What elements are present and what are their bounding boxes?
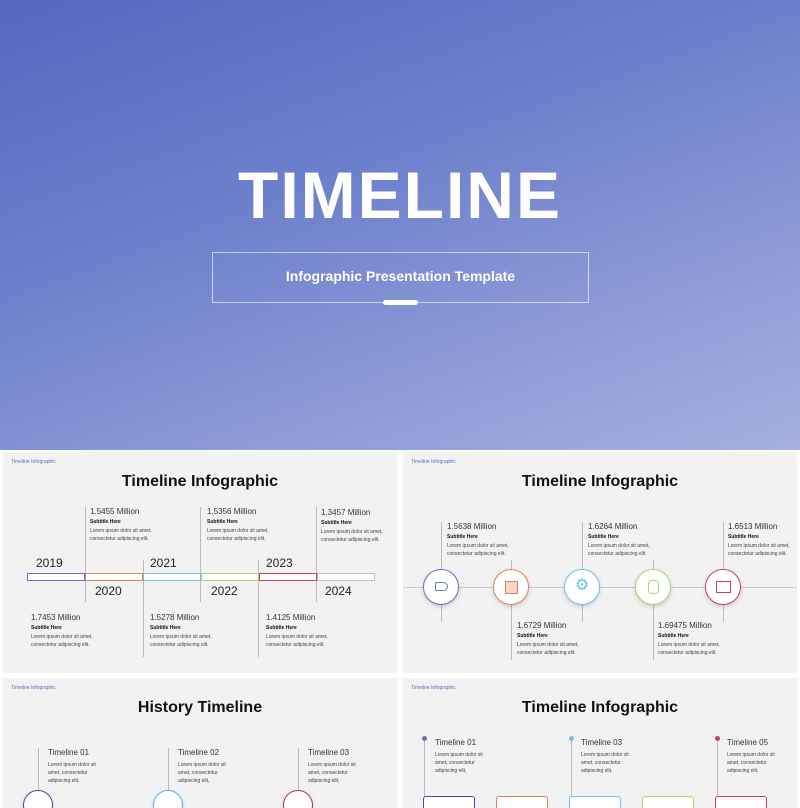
- text block 3: Subtitle Here: [588, 534, 619, 540]
- item 1: amet, consectetur: [435, 760, 475, 766]
- text block 5: consectetur adipiscing elit.: [728, 551, 787, 557]
- text block 4: Lorem ipsum dolor sit amet,: [658, 642, 720, 648]
- item 3: adipiscing elit,: [308, 778, 339, 784]
- boxes: [423, 796, 767, 808]
- dots: [422, 736, 720, 741]
- text block 3: [588, 522, 650, 557]
- years: 2024: [325, 584, 352, 598]
- text block 6: Lorem ipsum dolor sit amet,: [321, 529, 383, 535]
- item 1: amet, consectetur: [48, 770, 88, 776]
- text block 2: Lorem ipsum dolor sit amet,: [517, 642, 579, 648]
- heading: Timeline Infographic: [522, 473, 678, 490]
- text block 2: 1.6729 Million: [517, 621, 566, 630]
- text block 4: [207, 507, 269, 542]
- text block 4: 1.69475 Million: [658, 621, 712, 630]
- heading: Timeline Infographic: [122, 473, 278, 490]
- item 2: [178, 748, 226, 784]
- text block 4: consectetur adipiscing elit.: [207, 536, 266, 542]
- panel: circle timeline: Timeline Infographic: [411, 459, 456, 465]
- years: 2020: [95, 584, 122, 598]
- icon: news: [493, 569, 529, 605]
- text block 3: [150, 613, 212, 648]
- item 5: [727, 738, 775, 774]
- text block 5: [728, 522, 790, 557]
- text block 1: Subtitle Here: [447, 534, 478, 540]
- text block 3: 1.6264 Million: [588, 522, 637, 531]
- item 1: [435, 738, 483, 774]
- hero banner: [0, 0, 800, 450]
- text block 1: Subtitle Here: [31, 625, 62, 631]
- item 2: amet, consectetur: [178, 770, 218, 776]
- icon: tag: [423, 569, 459, 605]
- item 1: Lorem ipsum dolor sit: [48, 762, 96, 768]
- panel: history timeline: [3, 678, 397, 808]
- title: TIMELINE: [238, 158, 562, 232]
- panel: map timeline: [403, 678, 797, 808]
- item 1: Lorem ipsum dolor sit: [435, 752, 483, 758]
- years: [36, 556, 352, 598]
- text block 5: 1.4125 Million: [266, 613, 315, 622]
- text block 3: consectetur adipiscing elit.: [588, 551, 647, 557]
- item 5: Lorem ipsum dolor sit: [727, 752, 775, 758]
- subtitle box: Infographic Presentation Template: [286, 268, 515, 284]
- text block 4: 1.5356 Million: [207, 507, 256, 516]
- item 3: Lorem ipsum dolor sit: [581, 752, 629, 758]
- text block 6: [321, 508, 383, 543]
- text block 1: 1.5638 Million: [447, 522, 496, 531]
- item 1: adipiscing elit,: [48, 778, 79, 784]
- panel: circle timeline: [403, 452, 797, 673]
- text block 3: Lorem ipsum dolor sit amet,: [150, 634, 212, 640]
- text block 5: Subtitle Here: [266, 625, 297, 631]
- underline accent: [383, 300, 418, 305]
- timeline bar: [27, 573, 375, 581]
- text block 2: [90, 507, 152, 542]
- icon: gear: [564, 569, 600, 605]
- years: 2022: [211, 584, 238, 598]
- text block 1: Lorem ipsum dolor sit amet,: [31, 634, 93, 640]
- text block 3: 1.5278 Million: [150, 613, 199, 622]
- text block 2: Subtitle Here: [90, 519, 121, 525]
- icon circles: [422, 569, 742, 608]
- item 3: Timeline 03: [581, 738, 622, 747]
- text block 6: consectetur adipiscing elit.: [321, 537, 380, 543]
- panel: history timeline: Timeline Infographic: [11, 685, 56, 691]
- text block 1: [447, 522, 509, 557]
- item 1: [48, 748, 96, 784]
- heading: Timeline Infographic: [522, 699, 678, 716]
- panel: timeline bar: Timeline Infographic: [11, 459, 56, 465]
- item 2: Lorem ipsum dolor sit: [178, 762, 226, 768]
- text block 5: 1.6513 Million: [728, 522, 777, 531]
- text block 1: 1.7453 Million: [31, 613, 80, 622]
- years: 2023: [266, 556, 293, 570]
- heading: History Timeline: [138, 699, 262, 716]
- text block 5: Lorem ipsum dolor sit amet,: [266, 634, 328, 640]
- item 2: Timeline 02: [178, 748, 219, 757]
- text block 4: Subtitle Here: [207, 519, 238, 525]
- text block 1: [31, 613, 93, 648]
- text block 5: [266, 613, 328, 648]
- circles: [22, 790, 314, 808]
- item 3: Timeline 03: [308, 748, 349, 757]
- text block 3: Lorem ipsum dolor sit amet,: [588, 543, 650, 549]
- text block 2: Subtitle Here: [517, 633, 548, 639]
- item 3: adipiscing elit,: [581, 768, 612, 774]
- item 1: Timeline 01: [435, 738, 476, 747]
- text block 4: consectetur adipiscing elit.: [658, 650, 717, 656]
- text block 2: [517, 621, 579, 656]
- years: 2021: [150, 556, 177, 570]
- text block 5: Lorem ipsum dolor sit amet,: [728, 543, 790, 549]
- item 2: adipiscing elit,: [178, 778, 209, 784]
- item 3: [581, 738, 629, 774]
- text block 4: [658, 621, 720, 656]
- text block 2: Lorem ipsum dolor sit amet,: [90, 528, 152, 534]
- item 5: adipiscing elit,: [727, 768, 758, 774]
- text block 1: consectetur adipiscing elit.: [31, 642, 90, 648]
- panel: map timeline: Timeline Infographic: [411, 685, 456, 691]
- item 1: Timeline 01: [48, 748, 89, 757]
- text block 4: Subtitle Here: [658, 633, 689, 639]
- text block 1: consectetur adipiscing elit.: [447, 551, 506, 557]
- item 3: amet, consectetur: [308, 770, 348, 776]
- item 3: amet, consectetur: [581, 760, 621, 766]
- text block 5: consectetur adipiscing elit.: [266, 642, 325, 648]
- text block 3: Subtitle Here: [150, 625, 181, 631]
- icon: image: [705, 569, 741, 605]
- icon: gear: ⚙: [575, 577, 589, 594]
- item 5: amet, consectetur: [727, 760, 767, 766]
- text block 2: 1.5455 Million: [90, 507, 139, 516]
- text block 3: consectetur adipiscing elit.: [150, 642, 209, 648]
- text block 6: Subtitle Here: [321, 520, 352, 526]
- years: 2019: [36, 556, 63, 570]
- text block 5: Subtitle Here: [728, 534, 759, 540]
- subtitle box: [212, 252, 589, 303]
- panel: timeline bar: [3, 452, 397, 673]
- text block 2: consectetur adipiscing elit.: [517, 650, 576, 656]
- text block 1: Lorem ipsum dolor sit amet,: [447, 543, 509, 549]
- text block 6: 1.3457 Million: [321, 508, 370, 517]
- text block 2: consectetur adipiscing elit.: [90, 536, 149, 542]
- item 3: [308, 748, 356, 784]
- item 3: Lorem ipsum dolor sit: [308, 762, 356, 768]
- icon: database: [635, 569, 671, 605]
- item 1: adipiscing elit,: [435, 768, 466, 774]
- item 5: Timeline 05: [727, 738, 768, 747]
- text block 4: Lorem ipsum dolor sit amet,: [207, 528, 269, 534]
